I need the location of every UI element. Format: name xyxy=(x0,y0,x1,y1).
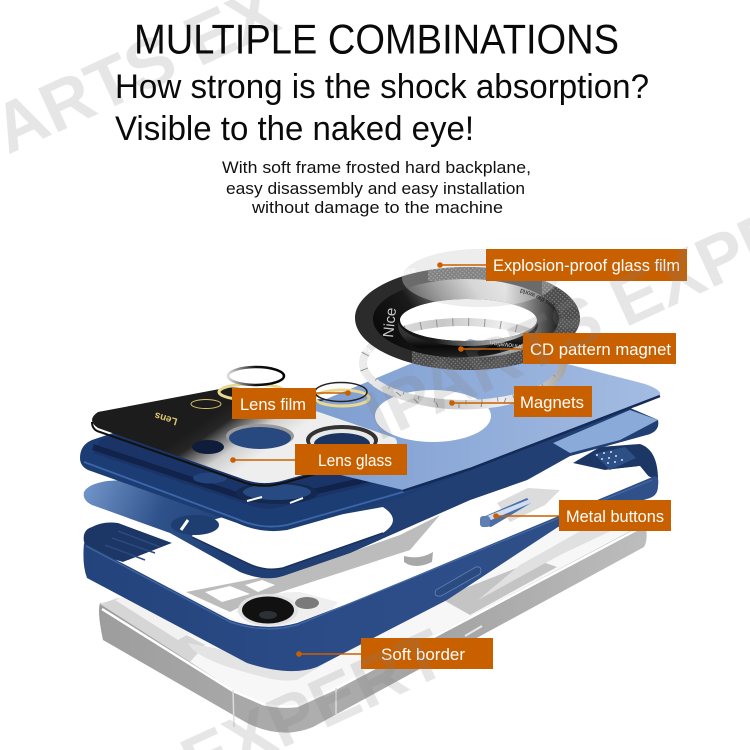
glass film back xyxy=(402,249,558,307)
text block: description: easy disassembly and easy installation xyxy=(226,180,525,198)
magnets ring xyxy=(363,322,563,404)
back plate xyxy=(300,339,660,490)
frame vent detail xyxy=(594,447,636,470)
heading: subtitle: How strong is the shock absorption? xyxy=(115,68,649,106)
callout: metal buttons: Metal buttons xyxy=(566,507,664,526)
soft border opening with phone back visible xyxy=(123,466,650,626)
callout: explosion-proof glass film: Explosion-proof glass film xyxy=(493,256,680,275)
text block: description xyxy=(222,159,531,217)
soft border ridges xyxy=(105,531,160,560)
callout: magnets: Magnets xyxy=(520,393,584,412)
callout: CD pattern magnet: CD pattern magnet xyxy=(530,340,671,359)
callout: metal buttons xyxy=(493,500,671,531)
ring word nice: Nice xyxy=(380,307,400,338)
CD pattern magnet ring xyxy=(355,267,580,370)
heading: subtitle xyxy=(115,68,649,148)
callout: soft border: Soft border xyxy=(381,645,465,664)
illustration: exploded phone case xyxy=(80,249,660,733)
panel gold ring xyxy=(191,400,221,408)
soft border front wall xyxy=(83,476,658,671)
text block: description: without damage to the machine xyxy=(251,199,503,217)
callout: magnets xyxy=(449,386,592,417)
magnet ring front xyxy=(363,371,563,407)
glass film overlay xyxy=(402,249,558,307)
lens panel xyxy=(92,388,397,486)
soft border back wall left xyxy=(84,522,172,562)
panel camera holes xyxy=(192,424,378,455)
ring lower inscription: Innovation xyxy=(489,339,522,350)
callout: explosion-proof glass film xyxy=(437,249,687,281)
metal buttons xyxy=(480,498,531,527)
panel gold text: Lens xyxy=(153,409,179,427)
callout: lens film xyxy=(232,388,351,419)
phone body xyxy=(99,490,647,733)
ring inscription: KEEP WITH MOBILE MAGNETIC CARD HOLDER xyxy=(363,268,416,354)
plate magnetic hole xyxy=(375,390,491,442)
callout: soft border xyxy=(296,638,493,669)
upper frame layer xyxy=(80,396,660,531)
callout: lens film: Lens film xyxy=(240,395,306,414)
heading: subtitle: Visible to the naked eye! xyxy=(115,110,474,148)
callout: lens glass: Lens glass xyxy=(318,451,392,470)
middle frame layer xyxy=(84,408,658,578)
lens film rings xyxy=(219,367,369,406)
callout: CD pattern magnet xyxy=(458,333,676,364)
soft border back wall right xyxy=(573,444,658,480)
text block: description: With soft frame frosted hard backplane, xyxy=(222,159,531,177)
phone face shadows under case xyxy=(440,520,630,615)
phone camera xyxy=(236,592,338,628)
callout: lens glass xyxy=(230,444,407,475)
plate edge xyxy=(403,396,660,491)
heading: title: MULTIPLE COMBINATIONS xyxy=(134,16,619,62)
ring upside-down inscription: changes the world xyxy=(520,288,562,318)
